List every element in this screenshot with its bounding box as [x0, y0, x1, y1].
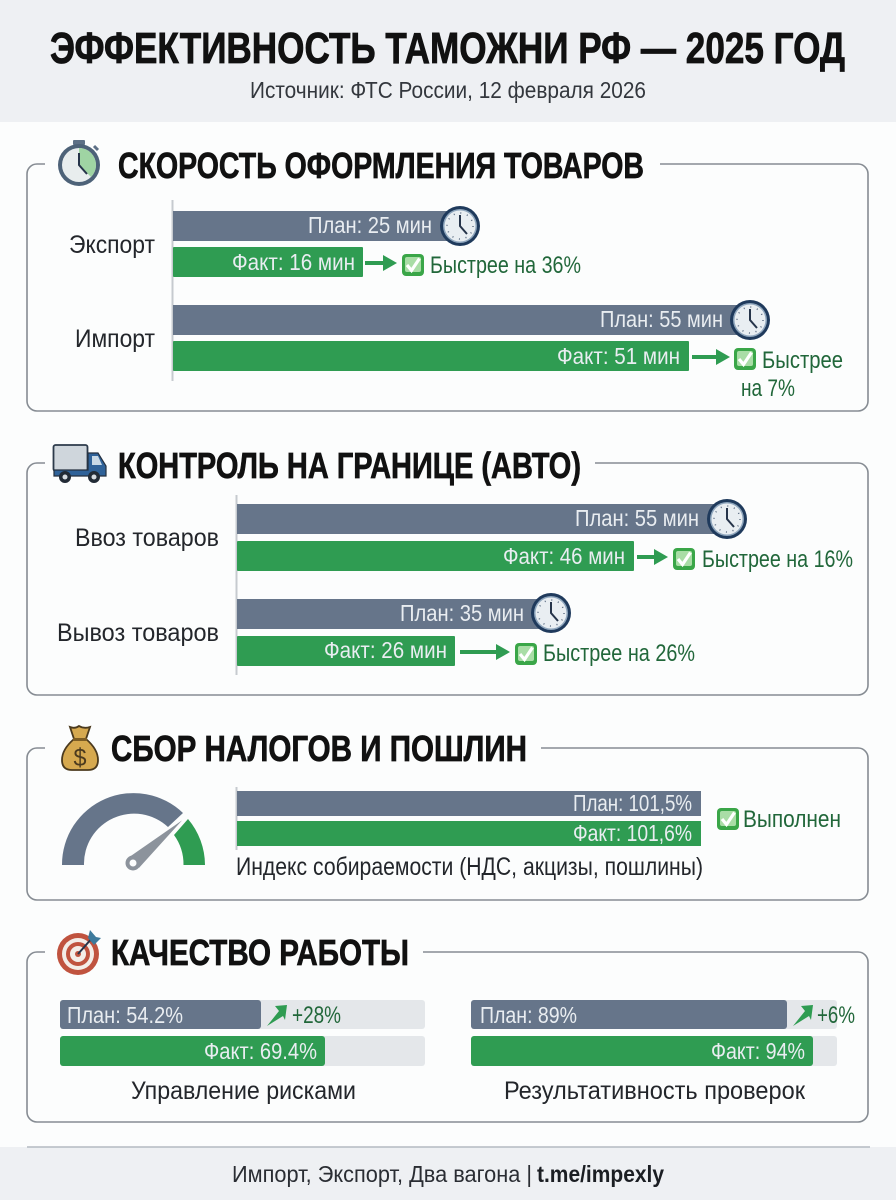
source line: Источник: ФТС России, 12 февраля 2026 — [250, 77, 646, 103]
status label: Выполнен — [743, 806, 841, 833]
row: export goods — [57, 593, 695, 667]
chart: inspection effectiveness: +6% — [817, 1002, 855, 1029]
row: export: Быстрее на 36% — [430, 252, 581, 279]
footer link: t.me/impexly — [537, 1161, 664, 1187]
chart: inspection effectiveness: Факт: 94% — [711, 1038, 805, 1064]
bar chart: collection index: План: 101,5% — [573, 790, 692, 816]
icon: check — [717, 808, 739, 830]
row: import: на 7% — [741, 375, 795, 402]
arrow: up — [267, 1005, 287, 1026]
icon: stopwatch — [58, 140, 100, 186]
panel: border control — [27, 445, 868, 695]
bar chart: collection index: Факт: 101,6% — [573, 820, 692, 846]
row: export goods: Факт: 26 мин — [324, 637, 447, 663]
panel: quality of work — [27, 930, 868, 1122]
icon: money bag: $ — [74, 744, 87, 772]
row: import goods — [75, 499, 853, 573]
icon: truck — [54, 445, 106, 483]
row: import goods: План: 55 мин — [575, 505, 699, 531]
panel: taxes and duties — [27, 726, 868, 900]
heading: СКОРОСТЬ ОФОРМЛЕНИЯ ТОВАРОВ — [118, 145, 644, 186]
heading: КАЧЕСТВО РАБОТЫ — [111, 932, 409, 973]
icon: clock — [730, 300, 770, 340]
chart: inspection effectiveness: План: 89% — [480, 1002, 577, 1028]
chart: risk management: Факт: 69.4% — [204, 1038, 317, 1064]
arrow — [637, 549, 668, 565]
chart: inspection effectiveness — [471, 1000, 855, 1105]
row: import goods: Быстрее на 16% — [702, 546, 853, 573]
icon: check — [734, 348, 756, 370]
row: export: Экспорт — [69, 231, 155, 259]
row: export — [69, 206, 581, 279]
gauge chart — [62, 793, 205, 870]
chart: risk management — [60, 1000, 425, 1105]
chart: inspection effectiveness: Результативность проверок — [504, 1077, 806, 1105]
row: import: Импорт — [75, 325, 155, 353]
icon: check — [402, 254, 424, 276]
arrow — [365, 255, 397, 271]
icon: money bag — [62, 726, 98, 772]
header band — [0, 0, 896, 122]
row: export: Факт: 16 мин — [232, 249, 355, 275]
icon: target — [57, 930, 101, 975]
chart: risk management: +28% — [292, 1002, 341, 1029]
footer text: Импорт, Экспорт, Два вагона | — [232, 1161, 532, 1187]
row: export goods: Вывоз товаров — [57, 619, 219, 647]
chart: risk management: Управление рисками — [131, 1077, 356, 1105]
row: import — [75, 300, 843, 402]
footer band — [0, 1147, 896, 1200]
heading: СБОР НАЛОГОВ И ПОШЛИН — [111, 728, 527, 769]
row: export goods: Быстрее на 26% — [543, 640, 695, 667]
row: import: План: 55 мин — [600, 306, 723, 332]
icon: check — [673, 548, 695, 570]
bar chart: collection index — [237, 790, 701, 846]
panel: speed of clearance — [27, 140, 868, 411]
arrow: up — [793, 1005, 813, 1026]
row: export: План: 25 мин — [308, 212, 432, 238]
row: import goods: Ввоз товаров — [75, 524, 219, 552]
icon: clock — [531, 593, 571, 633]
icon: check — [515, 643, 537, 665]
arrow — [460, 644, 510, 660]
chart: risk management: План: 54.2% — [67, 1002, 183, 1028]
arrow — [692, 349, 730, 365]
row: export goods: План: 35 мин — [400, 600, 524, 626]
icon: clock — [440, 206, 480, 246]
heading: КОНТРОЛЬ НА ГРАНИЦЕ (АВТО) — [118, 445, 581, 486]
row: import: Быстрее — [762, 347, 843, 374]
chart caption: Индекс собираемости (НДС, акцизы, пошлины) — [236, 853, 703, 881]
icon: clock — [707, 499, 747, 539]
row: import: Факт: 51 мин — [557, 343, 680, 369]
row: import goods: Факт: 46 мин — [503, 543, 625, 569]
